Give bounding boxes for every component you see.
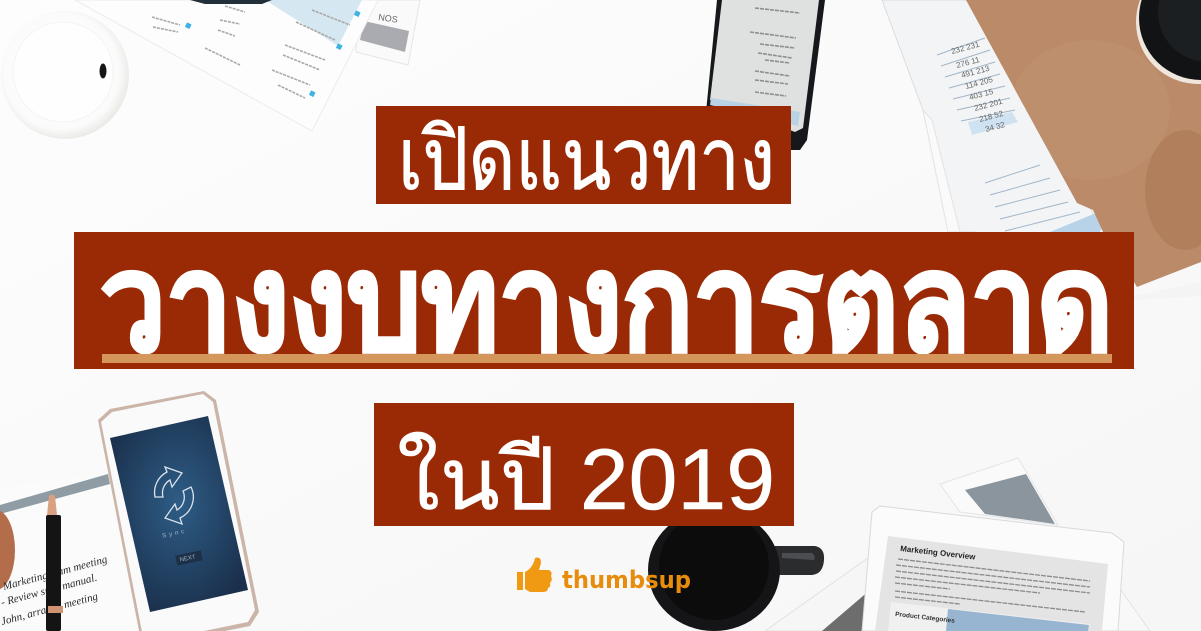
photo: report sheets top left (75, 0, 420, 131)
photo: smartphone with sync screen (98, 391, 259, 631)
photo: smartphone with sync screen: Sync (162, 528, 188, 540)
photo: stacked report papers (882, 0, 1115, 290)
photo: black coffee mug (648, 509, 824, 631)
icon: thumbs up (517, 558, 552, 592)
photo: stacked report papers: 34 32 (984, 120, 1006, 134)
photo: stacked report papers: 232 201 (973, 97, 1004, 113)
logo: thumbsup (517, 558, 691, 594)
photo: notebook with handwriting (0, 472, 145, 631)
icon: black pen (46, 494, 63, 631)
photo: coffee cup lid (1, 11, 129, 139)
photo: newspaper clippings (765, 458, 1150, 631)
photo: stacked report papers: 218 52 (978, 109, 1005, 124)
photo: tablet with marketing overview: Marketing Overview (900, 544, 977, 562)
logo: thumbsup: thumbsup (562, 566, 691, 594)
photo: notebook with handwriting: Marketing team meeting (1, 553, 109, 593)
photo: stacked report papers: 114 205 (964, 75, 994, 91)
title line 1 banner: เปิดแนวทาง (398, 112, 775, 208)
photo: notebook with handwriting: - Review spec manual. (0, 572, 98, 609)
photo: stacked report papers: 276 11 (955, 55, 981, 70)
photo: stacked report papers: 491 213 (960, 64, 991, 80)
photo: report sheets top left: NOS (378, 12, 398, 25)
icon: sync arrows (155, 467, 193, 524)
photo: stacked report papers: 403 15 (968, 87, 995, 102)
photo: notebook with handwriting: John, arrange meeting (0, 590, 100, 628)
photo: stacked report papers: 232 231 (950, 40, 981, 56)
title line 3 banner (374, 403, 794, 528)
photo: dark coffee cup top right (1136, 0, 1201, 84)
photo: smartphone top (706, 0, 825, 150)
photo: tablet with marketing overview (862, 506, 1124, 631)
title line 3 banner: ในปี 2019 (397, 432, 775, 528)
photo: kraft folder (966, 0, 1201, 300)
photo: smartphone with sync screen: NEXT (179, 554, 197, 564)
photo: tablet with marketing overview: Product Categories (895, 611, 956, 625)
